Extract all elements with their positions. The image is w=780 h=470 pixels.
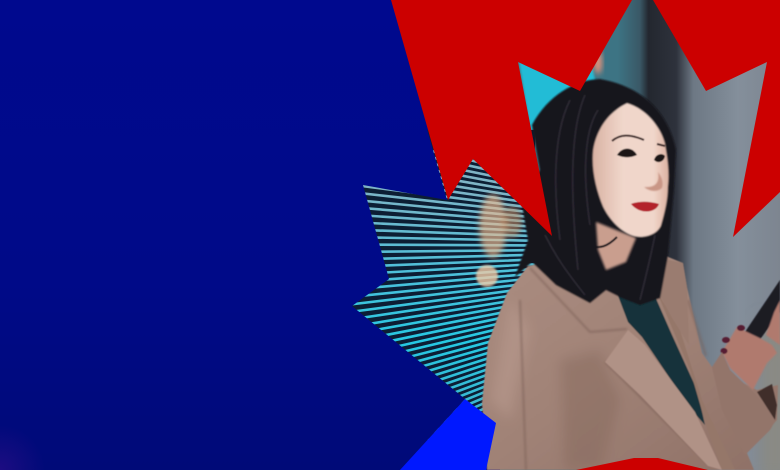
navy panel xyxy=(0,0,465,470)
nails xyxy=(720,325,745,354)
coat shadow under lapel xyxy=(560,350,620,470)
dark inner top xyxy=(612,280,705,425)
nose xyxy=(644,172,663,191)
red leaf shape right xyxy=(653,0,780,237)
hand xyxy=(722,300,780,390)
right collar xyxy=(655,258,689,345)
cuff interior xyxy=(757,384,777,420)
purple corner glow xyxy=(0,380,90,470)
neck xyxy=(596,222,636,270)
phone xyxy=(745,280,780,345)
front strip beside lapel xyxy=(655,288,735,470)
photo: woman xyxy=(482,79,780,470)
right lapel xyxy=(605,330,722,470)
red leaf shape bottom xyxy=(576,458,708,470)
hair highlights xyxy=(545,95,655,300)
hair xyxy=(515,79,676,305)
coat fold lines xyxy=(520,268,707,470)
coat highlight on shoulder xyxy=(490,300,530,420)
eyes xyxy=(617,149,665,162)
neck shadow strand xyxy=(586,237,617,247)
lips xyxy=(631,202,659,212)
face xyxy=(593,103,669,237)
red leaf shape left xyxy=(391,0,632,236)
sleeve xyxy=(712,352,777,455)
eyebrows xyxy=(612,136,665,146)
bright blue leaf point xyxy=(400,399,496,470)
photo: LED screen with fanned stripes xyxy=(352,130,535,440)
photo: blurred street background xyxy=(500,0,780,470)
coat xyxy=(482,252,778,470)
